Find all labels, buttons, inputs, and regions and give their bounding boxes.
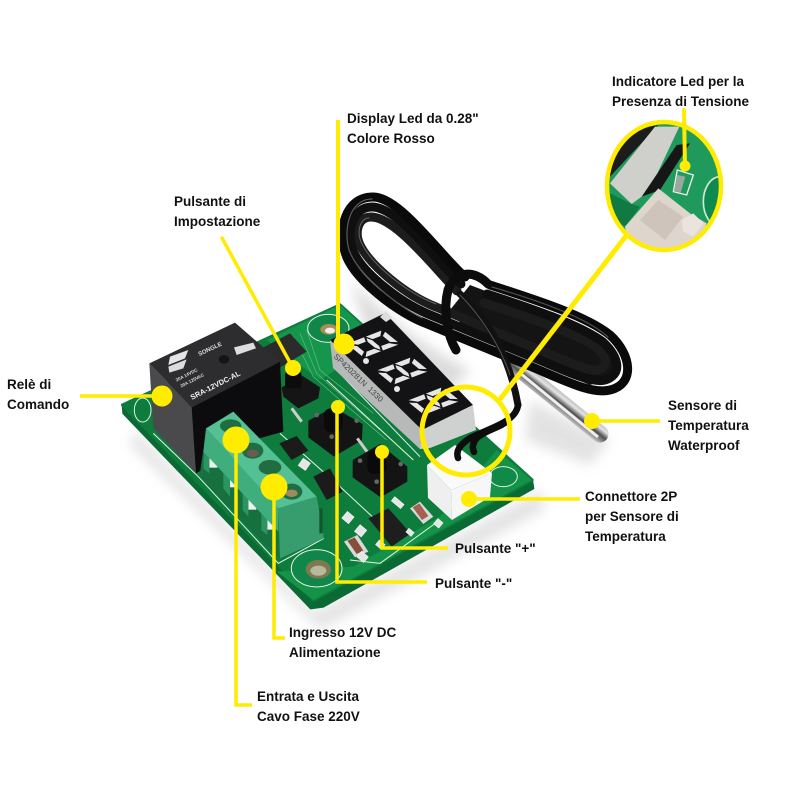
- callout: Connettore 2P: [461, 489, 679, 544]
- callout: Indicatore Led: Presenza di Tensione: [612, 94, 750, 109]
- white connector: [427, 445, 492, 520]
- callout: magnifier circle and connecting line: [422, 236, 626, 475]
- relay: SRA-12VDC-AL: [189, 369, 242, 402]
- screw terminal block: [199, 412, 324, 558]
- callout: Ingresso 12V DC: [260, 474, 397, 660]
- callout: Display Led: [334, 111, 479, 354]
- relay: 20A 14VDC: [175, 367, 199, 383]
- mounting holes: [134, 314, 517, 587]
- callout: Pulsante plus: Pulsante "+": [455, 541, 536, 556]
- SMD components: [279, 436, 443, 563]
- callout: Entrata e Uscita: Entrata e Uscita: [257, 689, 360, 704]
- relay: SONGLE: [198, 342, 223, 358]
- callout: Indicatore Led: Indicatore Led per la: [612, 74, 745, 89]
- board shadow: [130, 430, 545, 630]
- callout: Sensore di Temperatura: [584, 398, 749, 453]
- LED display: [330, 311, 476, 449]
- callout: Sensore di Temperatura: Temperatura: [668, 418, 749, 433]
- relay: 20A 125VAC: [180, 372, 206, 389]
- callout: Connettore 2P: per Sensore di: [585, 509, 679, 524]
- relay: [149, 323, 283, 473]
- callout: Pulsante minus: [331, 400, 512, 591]
- traces: [153, 330, 440, 563]
- callout: Sensore di Temperatura: Sensore di: [668, 398, 737, 413]
- callout: Ingresso 12V DC: Alimentazione: [289, 645, 381, 660]
- sensor wires to connector: [457, 405, 518, 458]
- minus button: [292, 407, 368, 457]
- callout: Connettore 2P: Connettore 2P: [585, 489, 677, 504]
- callout: Entrata e Uscita: Cavo Fase 220V: [257, 709, 360, 724]
- callout: Display Led: Colore Rosso: [347, 131, 435, 146]
- product photo: thermostat board and sensor: [123, 197, 628, 630]
- setting button: [282, 372, 320, 408]
- magnified inset: power LED: [604, 120, 724, 252]
- circuit board: [123, 305, 533, 608]
- callout: Display Led: Display Led da 0.28": [347, 111, 479, 126]
- callout: Ingresso 12V DC: Ingresso 12V DC: [289, 625, 397, 640]
- cable shadow: [350, 280, 470, 400]
- SMD chip: [262, 333, 307, 368]
- callout: Relè di Comando: [7, 377, 172, 412]
- plus button: [353, 444, 407, 497]
- callout: Pulsante minus: Pulsante "-": [435, 576, 512, 591]
- callout: Pulsante plus: [375, 445, 536, 556]
- callout: Pulsante di Impostazione: Pulsante di: [174, 194, 246, 209]
- callout: Pulsante di Impostazione: [174, 194, 301, 376]
- callout: Pulsante di Impostazione: Impostazione: [174, 214, 261, 229]
- LED display: SP420281N 1330: [332, 352, 385, 404]
- callout: Connettore 2P: Temperatura: [585, 529, 666, 544]
- callout: Indicatore Led: [612, 74, 750, 172]
- callout: Relè di Comando: Relè di: [7, 377, 51, 392]
- metal probe: [517, 367, 600, 437]
- callout: Sensore di Temperatura: Waterproof: [668, 438, 740, 453]
- temperature sensor cable: [342, 197, 628, 405]
- callout: Entrata e Uscita: [222, 426, 360, 724]
- callout: Relè di Comando: Comando: [7, 397, 69, 412]
- probe shadow: [525, 400, 610, 465]
